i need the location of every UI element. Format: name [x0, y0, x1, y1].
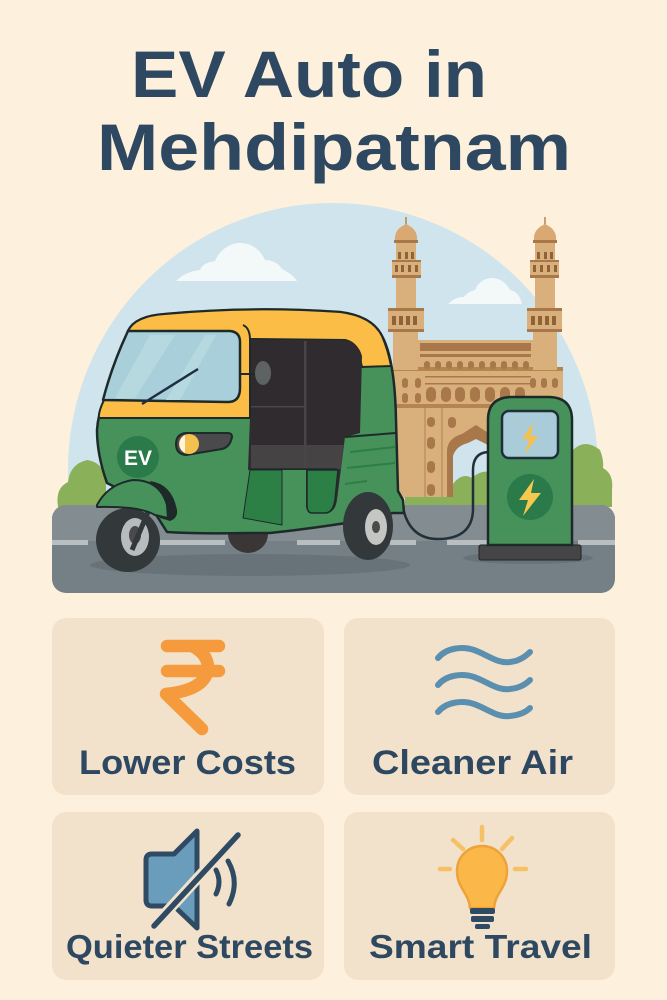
- road: [52, 505, 615, 593]
- charging station: [479, 397, 581, 560]
- right minaret: [544, 217, 546, 226]
- auto rickshaw: [96, 309, 404, 572]
- mirror: [241, 361, 271, 385]
- sky dome: [68, 203, 598, 510]
- passenger opening: [248, 340, 362, 513]
- pillar and band strokes: [100, 325, 250, 418]
- front wheel: [96, 508, 160, 572]
- bushes: [57, 444, 612, 507]
- headlight: [176, 433, 232, 455]
- pump screen: [502, 411, 558, 458]
- title: [97, 37, 571, 184]
- rear panel lines: [345, 447, 395, 484]
- windshield: [103, 331, 240, 402]
- pump body: [488, 397, 572, 545]
- icon: light bulb: [440, 827, 526, 929]
- middle wheel: [228, 515, 268, 553]
- lower door panels: [243, 470, 282, 525]
- pump base: [479, 545, 581, 560]
- cloud left: [176, 243, 297, 281]
- badge circle: [507, 474, 553, 520]
- label: Cleaner Air: [372, 744, 573, 782]
- left minaret: [405, 217, 407, 226]
- rear wheel: [343, 492, 393, 560]
- card: Cleaner Air: [344, 618, 615, 795]
- label: Smart Travel: [369, 928, 592, 965]
- badge bolt: [519, 479, 541, 516]
- central arch: [447, 425, 490, 497]
- EV badge: EV: [124, 447, 152, 470]
- label: Lower Costs: [79, 744, 296, 782]
- icon: air waves: [438, 648, 530, 716]
- card: Smart Travel: [344, 812, 615, 980]
- title: Mehdipatnam: [97, 110, 571, 184]
- ground bushes strip: [405, 497, 575, 507]
- charging cable: [404, 452, 488, 539]
- screen bolt: [522, 423, 538, 454]
- main building: [393, 367, 563, 498]
- icon: rupee: [166, 646, 219, 729]
- card: Quieter Streets: [52, 812, 324, 980]
- cloud right: [448, 278, 522, 304]
- label: Quieter Streets: [66, 928, 313, 965]
- arch row: [402, 361, 558, 496]
- icon: muted speaker: [146, 831, 240, 928]
- title: EV Auto in: [131, 37, 487, 111]
- card: Lower Costs: [52, 618, 324, 795]
- body: [97, 309, 404, 533]
- EV badge: [117, 436, 159, 478]
- panel: street scene: [52, 203, 615, 593]
- front fender: [97, 480, 177, 521]
- roof yellow: [99, 309, 391, 418]
- Charminar monument: [388, 217, 563, 498]
- wiper: [142, 369, 198, 404]
